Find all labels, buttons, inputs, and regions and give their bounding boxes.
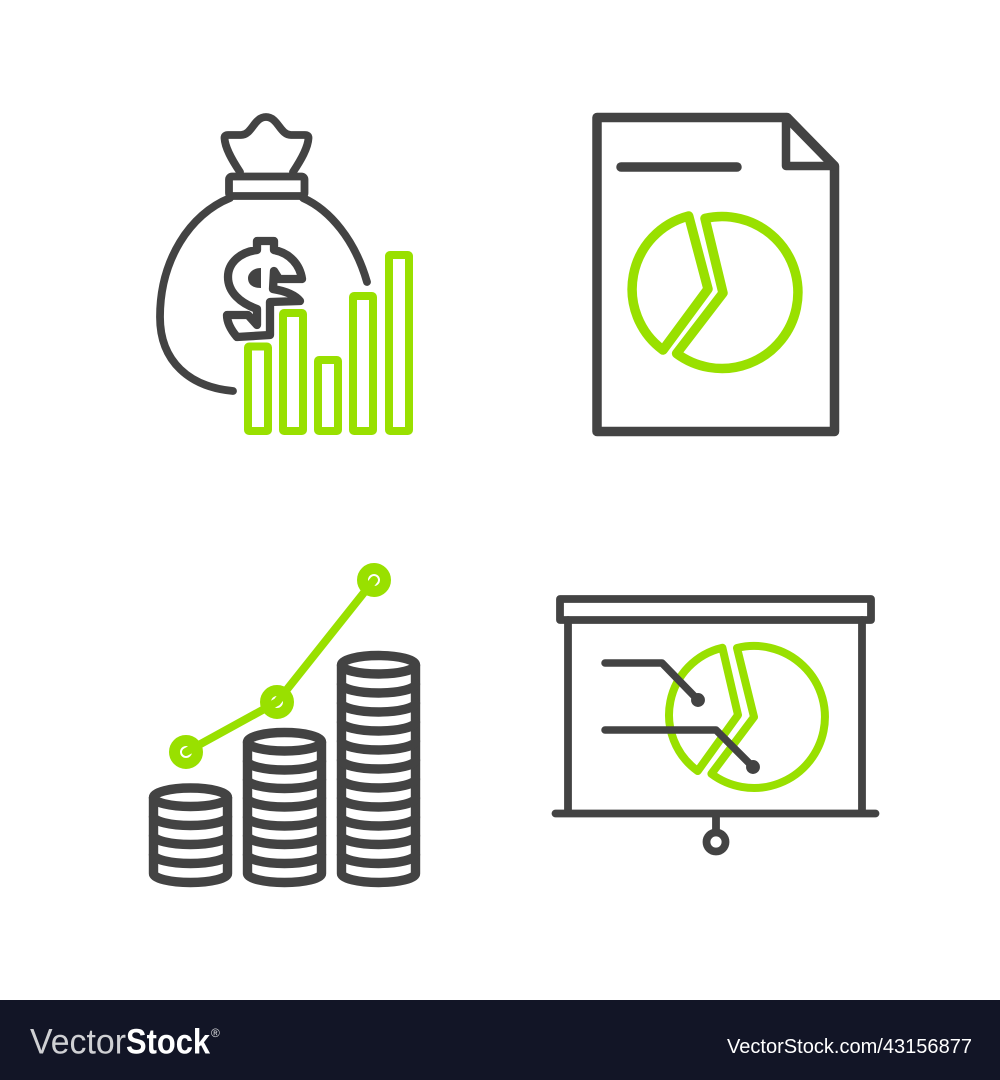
icon: document with pie chart	[597, 118, 834, 432]
bag knot	[224, 117, 308, 172]
document outline	[597, 118, 834, 432]
footer image id: VectorStock.com/43156877	[727, 1035, 972, 1058]
screen roller	[560, 599, 871, 620]
folded corner	[786, 118, 834, 166]
footer logo: Vector	[30, 1022, 126, 1062]
title line	[621, 162, 737, 172]
footer logo: Stock	[126, 1022, 210, 1062]
callout lines	[605, 663, 756, 770]
pull ring	[706, 832, 726, 852]
registered mark: ®	[211, 1026, 220, 1040]
footer logo	[30, 1022, 210, 1062]
bar chart	[248, 255, 409, 431]
bag body right curve	[303, 198, 367, 282]
screen base and stem	[556, 814, 876, 832]
icon: money bag with bar chart	[160, 117, 409, 431]
icon: coin stacks with growth line	[154, 568, 416, 882]
pie chart	[632, 216, 798, 368]
coin stack small	[154, 788, 228, 882]
coin stack large	[342, 656, 416, 882]
bag collar	[229, 176, 304, 196]
growth line with nodes	[174, 568, 386, 764]
dollar sign	[227, 241, 302, 337]
coin stack medium	[248, 733, 322, 882]
screen sides	[568, 620, 862, 813]
icon: projection screen with pie chart	[556, 599, 876, 852]
bag body left curve	[160, 198, 233, 391]
pie chart	[669, 646, 825, 788]
footer bar	[0, 1000, 1000, 1080]
